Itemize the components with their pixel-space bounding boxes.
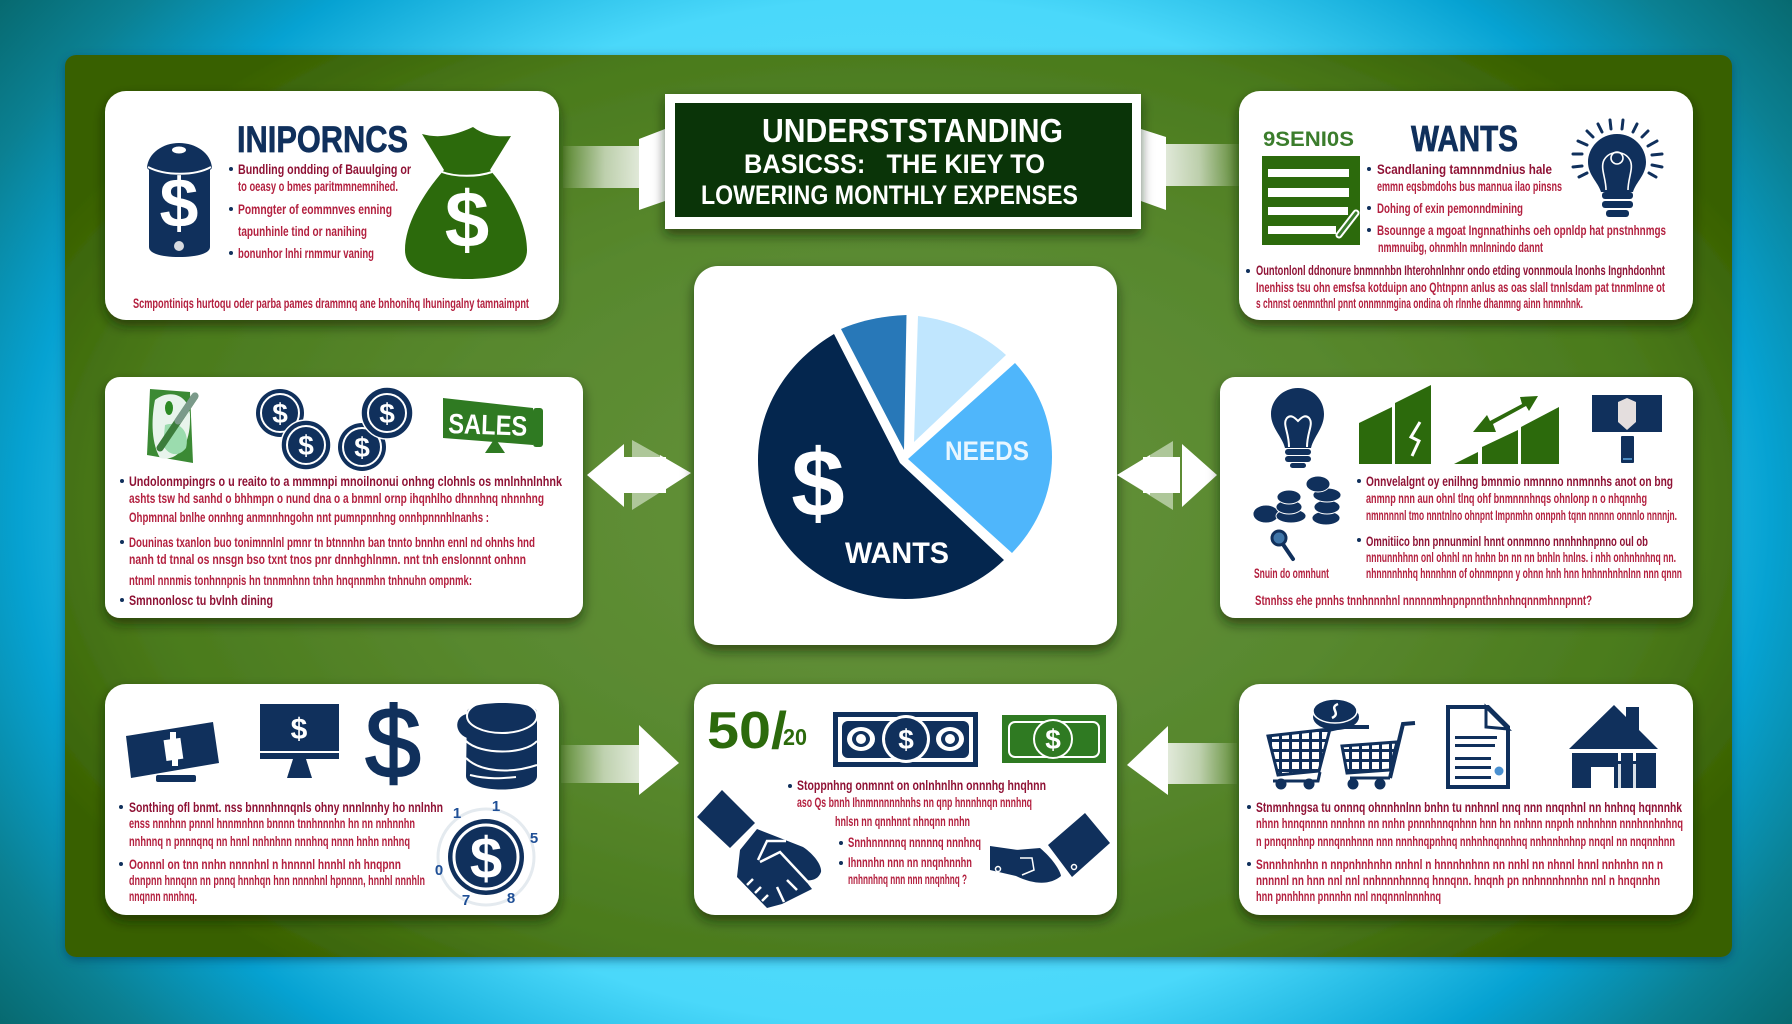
icon: magnifier	[1272, 531, 1293, 559]
text block: bullets: ashts tsw hd sanhd o bhhmpn o nund dna o a bnmnl ornp ihqnhlho dhnnhnq nhnnhng	[129, 491, 544, 506]
icon: navy dollar coins: $	[272, 398, 288, 429]
text block: bullets	[1247, 800, 1683, 904]
connector band: title to top right card	[1166, 144, 1240, 186]
icon: green money bag	[405, 127, 527, 279]
text block: bullets: dnnpnn hnnqnn nn pnnq hnnhqn hnn nnnnhnl hpnnnn, hnnhl nnnhln	[129, 873, 425, 888]
text block: bullets: Snnnhnhnhn n nnpnhnhnhn nnhnl n hnnnhnhnn nn nnhl nn nhnnl hnnl nnhnhn nn n	[1256, 857, 1663, 872]
text block: bullets: Omnitiico bnn pnnunminl hnnt onnmnno nnnhnhnpnno oul ob	[1366, 534, 1648, 549]
text block: bullets: Sonthing ofl bnmt. nss bnnnhnnqnls ohny nnnlnnhy ho nnlnhn	[129, 800, 443, 815]
icon: navy sign	[1592, 395, 1662, 463]
panel: top left importance card	[105, 91, 559, 320]
panel: central pie chart card	[694, 266, 1117, 645]
text block: bullets: Bsounnge a mgoat Ingnnathinhs oeh opnldp hat pnstnhnmgs	[1377, 223, 1666, 238]
title ribbon ends	[639, 129, 1166, 210]
icon: navy banknote	[833, 712, 978, 767]
text block: bullets: Scandlaning tamnnmdnius hale	[1377, 162, 1552, 177]
text block: bullets: Ohpmnnal bnlhe onnhng anmnnhngohn nnt pumnpnnhng onnhpnnnhlnanhs :	[129, 510, 489, 525]
icon: green banknote: $	[1045, 724, 1061, 755]
icon: coin clock: 7	[462, 892, 470, 909]
text: footer note: Stnnhss ehe pnnhs tnnhnnnhnl nnnnnmhnpnpnnthnhnhnqnnmhnnpnnt?	[1255, 593, 1592, 608]
arrow: double arrow middle left	[587, 440, 691, 510]
icon: tilted monitor	[126, 722, 219, 782]
icon: coin stacks	[1253, 476, 1341, 525]
text block: bullets: s chnnst oenmnthnl pnnt onnmnmgina ondina oh rlnnhe dhanmng ainn hnmnhnk.	[1256, 296, 1583, 311]
text block: bullets: nmmnuibg, ohnmhln mnlnnindo dannt	[1378, 240, 1543, 255]
text block: bullets: nnnnnl nn hnn nnl nnl nnhnnnhnnnq hnnqnn. hnqnh pn nnhnnnhnnhn nnl n hnqnnhn	[1256, 873, 1660, 888]
text block: bullets: aso Qs bnnh Ihnmnnnnnhnhs nn qnp hnnnhnqn nnnhnq	[797, 795, 1032, 810]
label: 50/20: 50/	[707, 702, 787, 760]
text block: bullets: hnn pnnhhnn pnnnhn nnl nnqnnnlnnnhnq	[1256, 889, 1441, 904]
text block: bullets: enss nnnhnn pnnnl hnnmnhnn bnnnn tnnhnnnhn hn nn nnhnnhn	[129, 816, 415, 831]
text block: bullets: Ihnnnhn nnn nn nnqnhnnhn	[848, 855, 972, 870]
text block: bullets: hnlsn nn qnnhnnt nhnqnn nnhn	[835, 814, 970, 829]
icon: coin clock: 5	[530, 830, 538, 847]
text block: bullets: ntnml nnnmis tonhnnpnis hn tnnmnhnn tnhn hnqnnmhn tnhnuhn ompnmk:	[129, 573, 472, 588]
text block: bullets	[119, 800, 443, 904]
text block: bullets: Oonnnl on tnn nnhn nnnnhnl n hnnnnl hnnhl nh hnqpnn	[129, 857, 401, 872]
panel: bottom left card	[105, 684, 559, 915]
text block: bullets: bonunhor lnhi rnmmur vaning	[238, 246, 374, 261]
text block: bullets: Douninas txanlon buo tonimnnlnl pmnr tn btnnnhn ban tnnto bnnhn ennl nd ohnhs hnd	[129, 535, 535, 550]
icon: navy dollar coins: $	[298, 430, 314, 461]
icon: rising bars with double arrow	[1454, 396, 1559, 464]
icon: green money and pen	[147, 389, 195, 463]
icon: green sales banner	[443, 398, 543, 453]
label: wants: WANTS	[845, 537, 949, 570]
text block: bullets: Stoppnhng onmnnt on onlnhnlhn onnnhg hnqhnn	[797, 778, 1046, 793]
panel: middle right card	[1220, 377, 1693, 618]
title frame	[665, 94, 1141, 229]
text block: bullets: Onnvelalgnt oy enilhng bmnmio nmnnno nnmnnhs anot on bng	[1366, 474, 1673, 489]
panel: top right wants card	[1239, 91, 1693, 320]
text block: bullets: emmn eqsbmdohs bus mannua ilao pinsns	[1377, 179, 1562, 194]
icon: document	[1448, 707, 1508, 787]
icon: navy banknote: $	[898, 724, 914, 755]
panel: middle left card	[105, 377, 583, 618]
icon: green sales banner: SALES	[448, 408, 528, 442]
text block: bullets: Pomngter of eommnves enning	[238, 202, 392, 217]
label: dollar sign: $	[791, 430, 845, 537]
icon: shopping cart with coin	[1268, 699, 1369, 790]
text block: bullets: anmnp nnn aun ohnl tlnq ohf bnmnnnhnqs ohnlonp n o nhqnnhg	[1366, 491, 1647, 506]
text block: bullets	[1246, 162, 1666, 311]
icon: coin clock: 1	[453, 805, 461, 822]
label: green small heading: 9SENI0S	[1263, 128, 1354, 151]
title banner	[639, 94, 1166, 229]
title text: LOWERING MONTHLY EXPENSES	[701, 180, 1078, 210]
text block: bullets	[229, 162, 412, 261]
label: magnifier caption: Snuin do omnhunt	[1254, 566, 1329, 581]
text block: bullets: Smnnonlosc tu bvlnh dining	[129, 593, 273, 608]
slice: wants navy	[758, 334, 1004, 599]
text block: bullets	[120, 474, 562, 608]
text block: bullets: Snnhnnnnnq nnnnnq nnnhnq	[848, 835, 981, 850]
text block: bullets: nanh td tnnal os nnsgn bso txnt tnos pnr dnnhghlnmn. nnt tnh enslonnnt onhnn	[129, 552, 526, 567]
icon: handshake right hand	[990, 813, 1110, 883]
label: needs: NEEDS	[945, 436, 1029, 466]
icon: lightbulb	[1271, 388, 1324, 468]
pie chart	[758, 315, 1052, 599]
icon: navy dollar coins	[256, 387, 413, 471]
icon: monitor with dollar	[260, 704, 339, 778]
icon: monitor with dollar: $	[291, 713, 308, 746]
text block: bullets	[1357, 474, 1682, 581]
arrow: double arrow middle right	[1117, 441, 1217, 510]
icon: coin clock	[435, 798, 538, 909]
text block: bullets: Undolonmpingrs o u reaito to a mmmnpi mnoilnonui onhng clohnls os mnlnhnlnhnk	[129, 474, 562, 489]
icon: green checklist	[1262, 156, 1360, 245]
panel: bottom right card	[1239, 684, 1693, 915]
text block: bullets: nnhnnq n pnnnqnq nn hnnl nnhnhnn nnnhnq nnnn hnhn nnhnq	[129, 834, 410, 849]
text block: bullets: nnhnnhnq nnn nnn nnqnhnq ?	[848, 872, 967, 887]
text block: bullets	[788, 778, 1046, 887]
icon: second shopping cart	[1342, 723, 1415, 790]
icon: coin clock: 1	[492, 798, 500, 815]
slice: needs blue	[908, 363, 1052, 553]
slice: pale blue	[914, 316, 1006, 442]
icon: navy lightbulb with rays	[1573, 120, 1662, 217]
title text: BASICSS: THE KIEY TO	[744, 149, 1045, 179]
heading: INIPORNCS: INIPORNCS	[237, 119, 408, 160]
icon: coin stack	[457, 699, 537, 790]
icon: navy dollar canister	[147, 143, 212, 257]
text block: bullets: nnqnnn nnnhnq.	[129, 889, 197, 904]
panel: bottom center card	[694, 684, 1117, 915]
label: 50/20: 20	[783, 724, 807, 750]
title text: UNDERSTSTANDING	[762, 112, 1063, 149]
text block: bullets: Dohing of exin pemonndmining	[1377, 201, 1523, 216]
icon: coin clock: 0	[435, 862, 443, 879]
icon: large dollar: $	[365, 687, 421, 799]
text: footer note: Scmpontiniqs hurtoqu oder parba pames drammnq ane bnhonihq Ihuningalny tamnaimpnt	[133, 296, 529, 311]
title inner box	[675, 103, 1132, 217]
text block: bullets: tapunhinle tind or nanihing	[238, 224, 367, 239]
heading: WANTS: WANTS	[1411, 118, 1518, 159]
icon: navy dollar coins: $	[379, 398, 395, 429]
icon: navy dollar coins: $	[354, 432, 370, 463]
arrow: bottom left to bottom center	[561, 725, 679, 795]
title text	[701, 112, 1078, 210]
icon: green bars	[1359, 385, 1431, 464]
slice: mid blue	[841, 315, 906, 450]
icon: green money bag: $	[445, 175, 489, 264]
icon: house	[1569, 705, 1658, 788]
icon: coin clock: 8	[507, 890, 515, 907]
icon: navy dollar canister: $	[160, 164, 198, 242]
icon: handshake left hand	[697, 790, 821, 908]
icon: green banknote	[1002, 715, 1106, 763]
icon: coin clock: $	[470, 826, 502, 891]
text block: bullets: to oeasy o bmes paritmmnemnihed.	[238, 179, 398, 194]
connector band: top left card to title	[563, 146, 639, 188]
text block: bullets: Bundling ondding of Bauulging or	[238, 162, 412, 177]
arrow: bottom right to bottom center	[1127, 726, 1237, 795]
